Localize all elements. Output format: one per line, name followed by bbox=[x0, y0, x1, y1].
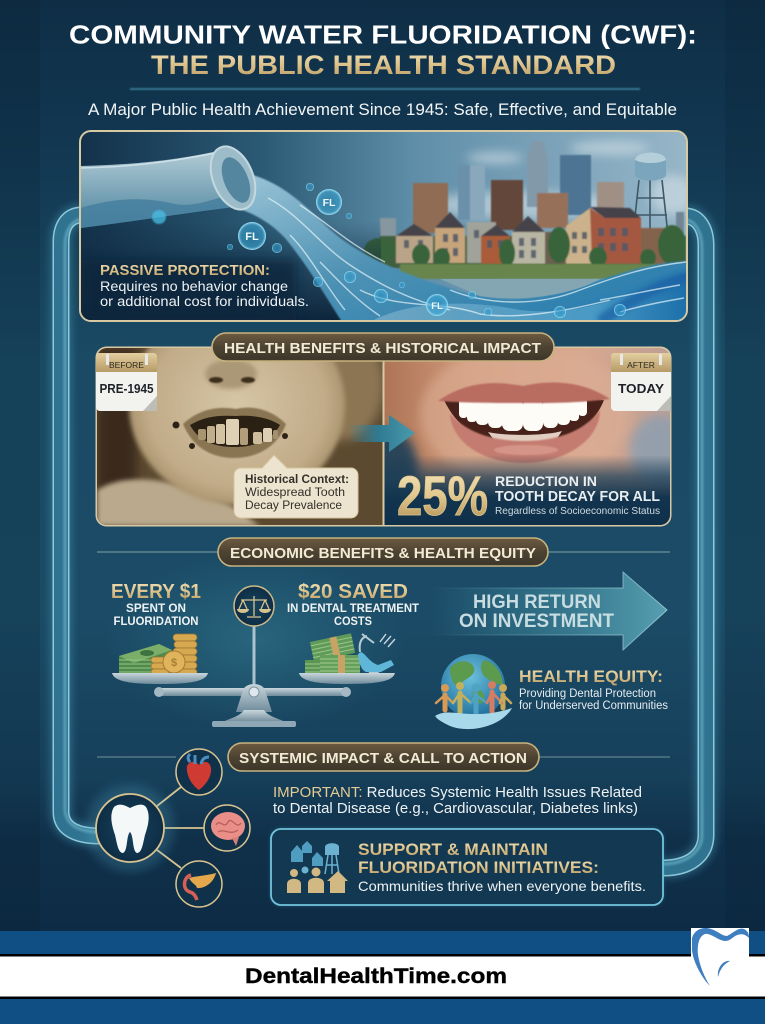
text: every dollar spent bbox=[111, 581, 201, 628]
panel: call to action: SUPPORT & MAINTAIN bbox=[358, 840, 548, 859]
text: passive protection: Requires no behavior change bbox=[100, 279, 288, 294]
scale medallion bbox=[234, 586, 274, 626]
title: THE PUBLIC HEALTH STANDARD bbox=[151, 50, 616, 80]
panel: call to action: Communities thrive when everyone benefits. bbox=[358, 878, 646, 894]
text: passive protection: PASSIVE PROTECTION: bbox=[100, 262, 270, 279]
title: COMMUNITY WATER FLUORIDATION (CWF): bbox=[69, 22, 697, 50]
drip bbox=[152, 210, 166, 224]
heading: economic benefits: ECONOMIC BENEFITS & HEALTH EQUITY bbox=[230, 545, 536, 562]
text: important systemic note bbox=[273, 785, 642, 817]
heading: economic benefits bbox=[97, 538, 670, 566]
text: health equity bbox=[519, 667, 668, 712]
text: passive protection bbox=[100, 262, 309, 309]
heading: systemic impact bbox=[97, 743, 670, 771]
photo: after, healthy smile bbox=[384, 348, 670, 525]
fluoride bubbles: FL bbox=[245, 231, 259, 243]
panel divider bbox=[382, 347, 384, 526]
text: twenty dollars saved: COSTS bbox=[334, 616, 372, 628]
city skyline bbox=[380, 141, 684, 243]
stat: 25 percent reduction: REDUCTION IN bbox=[495, 473, 597, 489]
left pan with money and coins: $ bbox=[171, 657, 177, 669]
footer bands bbox=[0, 931, 765, 1024]
text: health equity: for Underserved Communities bbox=[519, 700, 668, 712]
text: important systemic note: to Dental Disease (e.g., Cardiovascular, Diabetes links) bbox=[273, 801, 638, 817]
panel: passive protection hero bbox=[80, 131, 694, 322]
callout: historical context: Historical Context: bbox=[245, 474, 349, 486]
calendar: before bbox=[96, 353, 157, 411]
calendar: before: BEFORE bbox=[109, 360, 144, 370]
icon: brain bbox=[204, 805, 250, 851]
calendar: after: TODAY bbox=[618, 381, 664, 396]
balance scale illustration bbox=[112, 586, 395, 727]
houses bbox=[364, 207, 686, 268]
text: important systemic note: IMPORTANT: Reduces Systemic Health Issues Related bbox=[273, 785, 642, 801]
heading: health benefits: HEALTH BENEFITS & HISTORICAL IMPACT bbox=[224, 340, 541, 357]
footer website name: DentalHealthTime.com bbox=[245, 965, 507, 988]
smile bbox=[438, 382, 610, 463]
water body bbox=[236, 172, 690, 322]
icon: globe with people and wave bbox=[435, 654, 512, 729]
text: twenty dollars saved bbox=[287, 581, 419, 628]
right pan with money and dental chair bbox=[299, 633, 395, 684]
icon: tooth bbox=[96, 794, 164, 862]
arrow: high return on investment: ON INVESTMENT bbox=[459, 611, 614, 632]
title divider glow bbox=[130, 88, 640, 90]
dark lower-left backdrop bbox=[81, 222, 381, 320]
panel: call to action bbox=[271, 829, 663, 905]
title bbox=[69, 22, 697, 80]
callout: historical context bbox=[234, 455, 358, 518]
grass bank bbox=[400, 264, 690, 279]
heading: systemic impact: SYSTEMIC IMPACT & CALL TO ACTION bbox=[239, 750, 527, 767]
text: every dollar spent: EVERY $1 bbox=[111, 581, 201, 603]
fluoride bubbles: FL bbox=[323, 197, 336, 209]
arrow: high return on investment: HIGH RETURN bbox=[473, 592, 601, 613]
text: health equity: HEALTH EQUITY: bbox=[519, 667, 663, 686]
calendar: after: AFTER bbox=[627, 360, 655, 370]
text: passive protection: or additional cost for individuals. bbox=[100, 294, 309, 309]
text: every dollar spent: FLUORIDATION bbox=[114, 616, 198, 628]
stat: 25 percent reduction: TOOTH DECAY FOR ALL bbox=[495, 489, 660, 505]
diagram: tooth linked to organs bbox=[86, 749, 250, 907]
photo: before, child with tooth decay bbox=[97, 348, 382, 525]
glass tube connector bbox=[61, 215, 706, 868]
fluoride bubbles bbox=[227, 183, 626, 318]
water tower bbox=[634, 152, 668, 229]
icon: pancreas bbox=[176, 861, 222, 907]
calendar: before: PRE-1945 bbox=[100, 382, 154, 396]
arrow: before to after bbox=[348, 415, 415, 452]
icon: community bbox=[287, 841, 348, 893]
panel: health benefits comparison bbox=[96, 346, 672, 526]
panel: call to action: FLUORIDATION INITIATIVES: bbox=[358, 858, 599, 877]
calendar: after bbox=[611, 353, 671, 411]
callout: historical context: Widespread Tooth bbox=[245, 487, 345, 499]
glass pipe bbox=[81, 152, 230, 228]
left pan with money and coins bbox=[112, 634, 208, 684]
logo: dental tooth bbox=[691, 928, 749, 987]
stat: 25 percent reduction: Regardless of Socioeconomic Status bbox=[495, 505, 660, 517]
text: twenty dollars saved: IN DENTAL TREATMENT bbox=[287, 603, 419, 615]
text: health equity: Providing Dental Protection bbox=[519, 688, 656, 700]
sky clouds bbox=[420, 141, 694, 219]
arrow: high return on investment bbox=[430, 572, 667, 650]
text: twenty dollars saved: $20 SAVED bbox=[298, 581, 408, 603]
text: every dollar spent: SPENT ON bbox=[126, 603, 186, 615]
heading: health benefits bbox=[212, 333, 554, 361]
fluoride bubbles: FL bbox=[431, 301, 443, 312]
subtitle: A Major Public Health Achievement Since 1945: Safe, Effective, and Equitable bbox=[88, 101, 677, 119]
icon: heart bbox=[176, 749, 222, 795]
mouth and decayed teeth bbox=[183, 408, 286, 458]
stat: 25 percent reduction bbox=[397, 464, 660, 527]
stat: 25 percent reduction: 25% bbox=[397, 464, 488, 527]
callout: historical context: Decay Prevalence bbox=[245, 500, 342, 512]
